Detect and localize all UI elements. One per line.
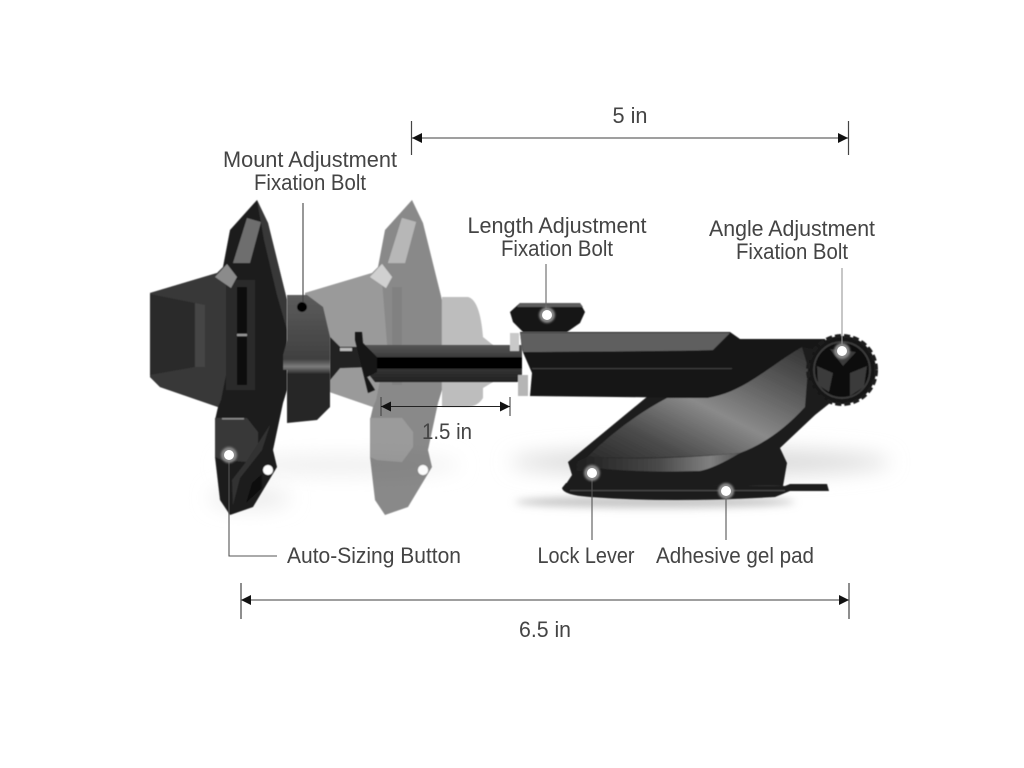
extension arm and base <box>520 332 876 500</box>
telescopic rod <box>330 332 528 396</box>
base sheen <box>587 347 808 458</box>
dimension: 1.5 in: 1.5 in <box>422 419 472 444</box>
dimension: 1.5 in <box>381 397 510 444</box>
arm body <box>520 332 830 398</box>
callout: lock lever: Lock Lever <box>538 543 634 568</box>
callout: length adjustment fixation bolt: Length Adjustment <box>468 213 646 238</box>
knurled knob <box>808 336 876 404</box>
release button <box>215 418 258 462</box>
gripper block <box>150 273 232 407</box>
length adjustment knob <box>510 303 585 332</box>
slots <box>237 287 247 333</box>
callout: angle adjustment fixation bolt: Fixation Bolt <box>736 239 848 264</box>
callout: angle adjustment fixation bolt <box>709 216 875 359</box>
lower facet <box>232 425 270 505</box>
callout: adhesive gel pad <box>656 483 814 568</box>
adhesive pad <box>562 483 829 500</box>
ghost mount: extended position <box>305 200 493 515</box>
lock lever <box>574 453 740 472</box>
callout: length adjustment fixation bolt: Fixation Bolt <box>501 236 613 261</box>
callout: adhesive gel pad: Adhesive gel pad <box>656 543 814 568</box>
dimension: 5 in <box>412 103 848 155</box>
callout: length adjustment fixation bolt <box>468 213 646 323</box>
arm top facet <box>520 333 730 352</box>
callout: mount adjustment fixation bolt <box>223 147 397 302</box>
diamond facet <box>215 264 237 288</box>
callout: auto-sizing button: Auto-Sizing Button <box>287 543 461 568</box>
callout: auto-sizing button <box>221 447 461 568</box>
dimension: 6.5 in: 6.5 in <box>519 617 571 642</box>
upper facet <box>233 218 261 263</box>
right plate edge <box>257 200 287 330</box>
mount ball joint <box>283 295 330 423</box>
callout: mount adjustment fixation bolt: Mount Adjustment <box>223 147 397 172</box>
ghost holder <box>305 200 442 515</box>
base body <box>566 340 840 486</box>
callout: mount adjustment fixation bolt: Fixation Bolt <box>254 170 366 195</box>
callout: lock lever <box>538 465 634 568</box>
front phone holder <box>150 200 287 515</box>
callout: angle adjustment fixation bolt: Angle Adjustment <box>709 216 875 241</box>
hook notch <box>263 465 273 475</box>
rod clip <box>355 332 377 393</box>
dimension: 6.5 in <box>241 583 849 642</box>
back plate <box>150 200 287 515</box>
dimension: 5 in: 5 in <box>612 103 648 128</box>
ground shadows <box>210 448 890 508</box>
ghost knob <box>442 297 493 407</box>
